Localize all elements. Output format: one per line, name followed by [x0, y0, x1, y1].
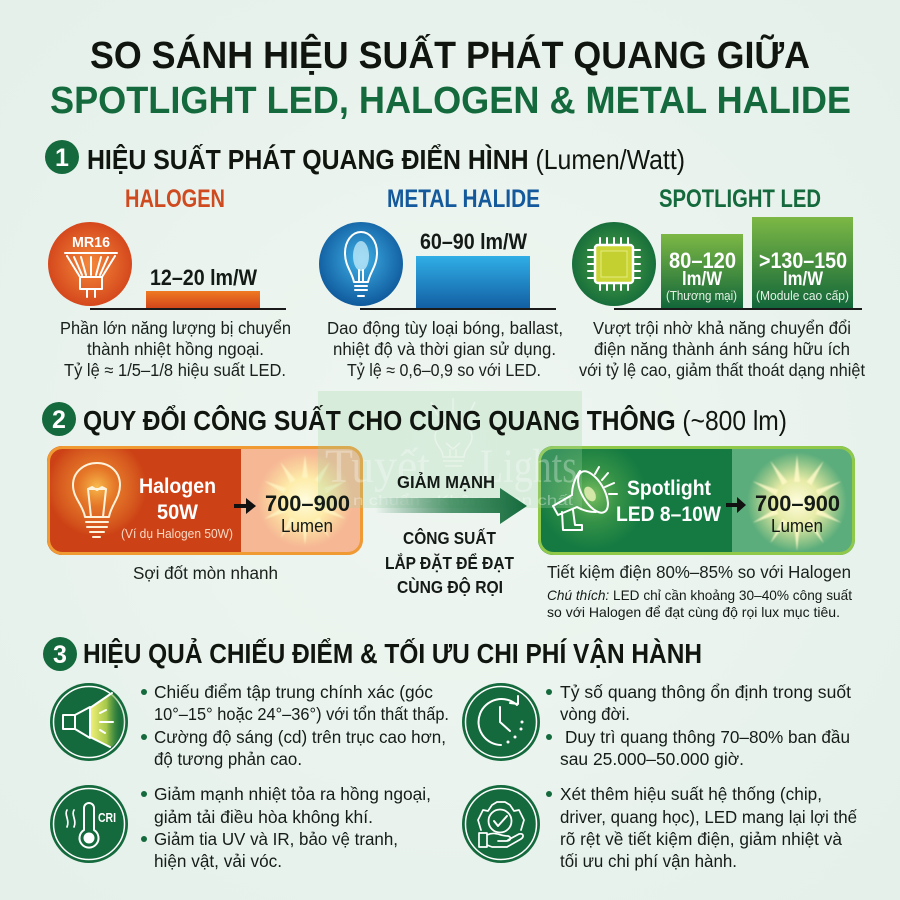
value: 12–20 lm/W: 12–20 lm/W	[150, 265, 257, 290]
text: lumen maintenance	[546, 682, 851, 769]
section 3 heading: HIỆU QUẢ CHIẾU ĐIỂM & TỐI ƯU CHI PHÍ VẬN HÀNH	[83, 637, 702, 669]
arrow	[234, 498, 256, 514]
description: metal halide: Dao động tùy loại bóng, ballast,	[327, 318, 563, 338]
baseline	[90, 308, 286, 310]
panel: halogen 50W box	[47, 437, 363, 555]
heading: halogen: HALOGEN	[125, 185, 225, 213]
bar: 12–20 lm/W	[146, 291, 260, 309]
icon: incandescent bulb	[73, 463, 120, 537]
icon: thermometer CRI: CRI	[98, 811, 116, 825]
title	[50, 33, 851, 122]
icon: metal halide bulb	[319, 222, 403, 306]
icon: LED chip	[572, 222, 656, 306]
icon: gear and hand	[462, 785, 540, 863]
description: spotlight LED	[579, 318, 865, 380]
box outline	[540, 448, 854, 554]
text: system efficiency: Xét thêm hiệu suất hệ thống (chip,	[560, 784, 822, 804]
text: heat and UV benefits: giảm tải điều hòa không khí.	[154, 807, 373, 827]
label: Halogen 50W	[121, 475, 233, 541]
label: Spotlight LED 8–10W: LED 8–10W	[616, 503, 721, 526]
text: focused beam benefits: 10°–15° hoặc 24°–36°) với tổn thất thấp.	[154, 704, 449, 724]
description: halogen: Phần lớn năng lượng bị chuyển	[60, 318, 291, 338]
description: metal halide	[327, 318, 563, 380]
bar: 60–90 lm/W	[416, 256, 530, 309]
bar: >130–150 lm/W: >130–150	[759, 248, 847, 273]
text: lumen maintenance: Tỷ số quang thông ổn định trong suốt	[560, 682, 851, 702]
text: system efficiency: rõ rệt về tiết kiệm điện, giảm nhiệt và	[560, 829, 842, 849]
description: spotlight LED: điện năng thành ánh sáng hữu ích	[594, 339, 850, 359]
description: halogen: Tỷ lệ ≈ 1/5–1/8 hiệu suất LED.	[64, 360, 286, 380]
center arrow: sharp reduction: CÙNG ĐỘ RỌI	[397, 576, 503, 597]
text: lumen maintenance: Duy trì quang thông 70–80% ban đầu	[565, 727, 850, 747]
watermark: Tuyết	[325, 440, 431, 493]
value: LED 700–900 Lumen: 700–900	[755, 491, 840, 516]
watermark: n chuẩn - Không gian chất	[353, 492, 573, 508]
value: halogen 700–900 Lumen	[265, 491, 350, 536]
center arrow: sharp reduction: LẮP ĐẶT ĐỂ ĐẠT	[385, 552, 514, 573]
section 1 heading: HIỆU SUẤT PHÁT QUANG ĐIỂN HÌNH (Lumen/Watt)	[87, 144, 685, 175]
text: system efficiency: driver, quang học), LED mang lại lợi thế	[560, 807, 857, 827]
icon: clock lifetime	[462, 683, 540, 761]
description: spotlight LED: Vượt trội nhờ khả năng chuyển đổi	[593, 318, 851, 338]
bar: >130–150 lm/W: (Module cao cấp)	[756, 289, 849, 303]
caption: energy saving: Chú thích: LED chỉ cần khoảng 30–40% công suất	[547, 587, 852, 603]
description: metal halide: Tỷ lệ ≈ 0,6–0,9 so với LED.	[347, 360, 541, 380]
bar: >130–150 lm/W	[752, 217, 853, 309]
caption: energy saving: Tiết kiệm điện 80%–85% so với Halogen	[547, 562, 851, 582]
bar: 80–120 lm/W	[661, 234, 743, 309]
text: focused beam benefits: Cường độ sáng (cd) trên trục cao hơn,	[154, 727, 446, 747]
heading: metal halide: METAL HALIDE	[387, 185, 540, 213]
text: focused beam benefits	[141, 682, 449, 769]
value: LED 700–900 Lumen: Lumen	[771, 516, 823, 536]
value: halogen 700–900 Lumen: Lumen	[281, 516, 333, 536]
icon: spotlight	[553, 467, 617, 530]
text: heat and UV benefits: Giảm mạnh nhiệt tỏa ra hồng ngoại,	[154, 784, 431, 804]
center arrow: sharp reduction	[375, 471, 527, 597]
text: heat and UV benefits	[141, 784, 431, 871]
value: LED 700–900 Lumen	[755, 491, 840, 536]
icon: thermometer CRI	[50, 785, 128, 863]
baseline	[360, 308, 556, 310]
text: focused beam benefits: độ tương phản cao.	[154, 749, 302, 769]
description: spotlight LED: với tỷ lệ cao, giảm thất thoát dạng nhiệt	[579, 360, 865, 380]
text: heat and UV benefits: Giảm tia UV và IR, bảo vệ tranh,	[154, 829, 398, 849]
description: halogen: thành nhiệt hồng ngoại.	[87, 339, 264, 359]
bar: 80–120 lm/W: (Thương mại)	[666, 289, 737, 303]
bar: 80–120 lm/W: lm/W	[682, 269, 722, 290]
title: SO SÁNH HIỆU SUẤT PHÁT QUANG GIỮA	[90, 33, 810, 77]
baseline	[614, 308, 862, 310]
description: halogen	[60, 318, 291, 380]
arrow	[726, 497, 746, 513]
caption: energy saving	[547, 562, 852, 620]
section 2 heading: QUY ĐỔI CÔNG SUẤT CHO CÙNG QUANG THÔNG (~800 lm)	[83, 404, 787, 436]
icon: MR16 lamp: MR16	[72, 234, 110, 251]
section 2 heading: 2	[52, 406, 66, 434]
text: system efficiency: tối ưu chi phí vận hành.	[560, 851, 737, 871]
value: halogen 700–900 Lumen: 700–900	[265, 491, 350, 516]
panel: spotlight LED efficacy	[572, 185, 865, 380]
box outline	[48, 448, 362, 554]
caption: filament wears quickly: Sợi đốt mòn nhanh	[133, 563, 278, 583]
section 1 heading: 1	[55, 144, 69, 172]
label: Spotlight LED 8–10W	[616, 477, 721, 526]
text: heat and UV benefits: hiện vật, vải vóc.	[154, 851, 282, 871]
watermark: Lights	[480, 440, 577, 493]
center arrow: sharp reduction: CÔNG SUẤT	[403, 527, 496, 548]
panel: metal halide efficacy	[319, 185, 563, 380]
text: lumen maintenance: vòng đời.	[560, 704, 630, 724]
bar: >130–150 lm/W: lm/W	[783, 269, 823, 290]
value: 60–90 lm/W: 60–90 lm/W	[420, 229, 527, 254]
label: Halogen 50W: 50W	[157, 501, 198, 524]
icon: focused beam	[50, 683, 128, 761]
title: SPOTLIGHT LED, HALOGEN & METAL HALIDE	[50, 80, 851, 122]
label: Halogen 50W: (Ví dụ Halogen 50W)	[121, 526, 233, 541]
heading: spotlight LED: SPOTLIGHT LED	[659, 185, 821, 213]
caption: energy saving: so với Halogen để đạt cùng độ rọi lux mục tiêu.	[547, 604, 840, 620]
bar: 80–120 lm/W: 80–120	[669, 248, 736, 273]
center arrow: sharp reduction: GIẢM MẠNH	[397, 471, 495, 492]
text: system efficiency	[546, 784, 857, 871]
icon: MR16 lamp	[48, 222, 132, 306]
section 3 heading: 3	[53, 641, 67, 669]
label: Halogen 50W: Halogen	[139, 475, 216, 498]
text: focused beam benefits: Chiếu điểm tập trung chính xác (góc	[154, 682, 433, 702]
description: metal halide: nhiệt độ và thời gian sử dụng.	[333, 339, 556, 359]
panel: halogen efficacy	[48, 185, 291, 380]
panel: spotlight LED box	[537, 440, 855, 555]
label: Spotlight LED 8–10W: Spotlight	[627, 477, 711, 500]
text: lumen maintenance: sau 25.000–50.000 giờ.	[560, 749, 744, 769]
watermark	[318, 391, 582, 508]
